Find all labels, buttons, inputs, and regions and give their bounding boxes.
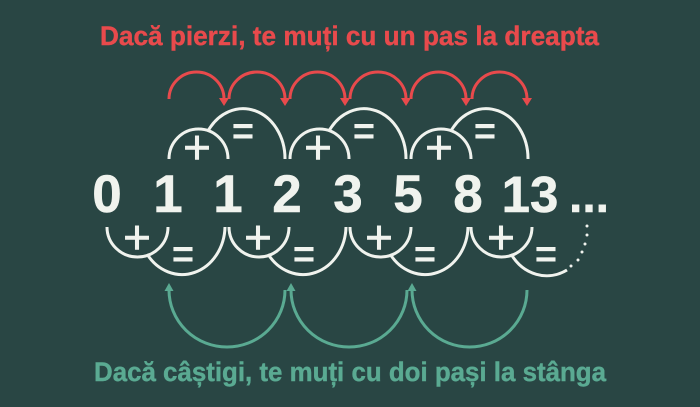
Fibonacci numbers: 2 bbox=[272, 165, 302, 224]
lower plus signs: + bbox=[123, 212, 151, 265]
upper white arcs bbox=[169, 109, 528, 159]
Fibonacci numbers: 5 bbox=[393, 165, 423, 224]
lower equals signs: = bbox=[172, 234, 194, 276]
Fibonacci numbers bbox=[92, 165, 609, 224]
upper equals signs: = bbox=[232, 111, 254, 153]
upper plus signs bbox=[183, 122, 453, 175]
Fibonacci numbers: 3 bbox=[333, 165, 363, 224]
upper plus signs: + bbox=[183, 122, 211, 175]
lower equals signs: = bbox=[293, 234, 315, 276]
Fibonacci numbers: 13 bbox=[502, 166, 558, 223]
lower plus signs: + bbox=[244, 212, 272, 265]
green arrows: two steps to the left bbox=[164, 283, 527, 347]
title: lose rule: Dacă pierzi, te muți cu un pas la dreapta bbox=[100, 21, 599, 51]
lower equals signs: = bbox=[535, 234, 557, 276]
Fibonacci numbers: 0 bbox=[92, 165, 122, 224]
upper equals signs: = bbox=[474, 111, 496, 153]
upper equals signs bbox=[232, 111, 496, 153]
lower white arcs bbox=[107, 227, 567, 276]
dotted continuation bbox=[570, 224, 588, 268]
red arrows: one step to the right bbox=[169, 72, 532, 106]
upper plus signs: + bbox=[304, 122, 332, 175]
lower equals signs bbox=[172, 234, 557, 276]
lower equals signs: = bbox=[414, 234, 436, 276]
upper equals signs: = bbox=[353, 111, 375, 153]
lower plus signs: + bbox=[487, 212, 515, 265]
title: win rule: Dacă câștigi, te muți cu doi pași la stânga bbox=[94, 357, 606, 387]
Fibonacci numbers: 1 bbox=[213, 165, 243, 224]
lower plus signs bbox=[123, 212, 515, 265]
Fibonacci numbers: ... bbox=[569, 170, 609, 223]
Fibonacci numbers: 1 bbox=[153, 165, 183, 224]
upper plus signs: + bbox=[425, 122, 453, 175]
Fibonacci numbers: 8 bbox=[453, 165, 483, 224]
lower plus signs: + bbox=[365, 212, 393, 265]
